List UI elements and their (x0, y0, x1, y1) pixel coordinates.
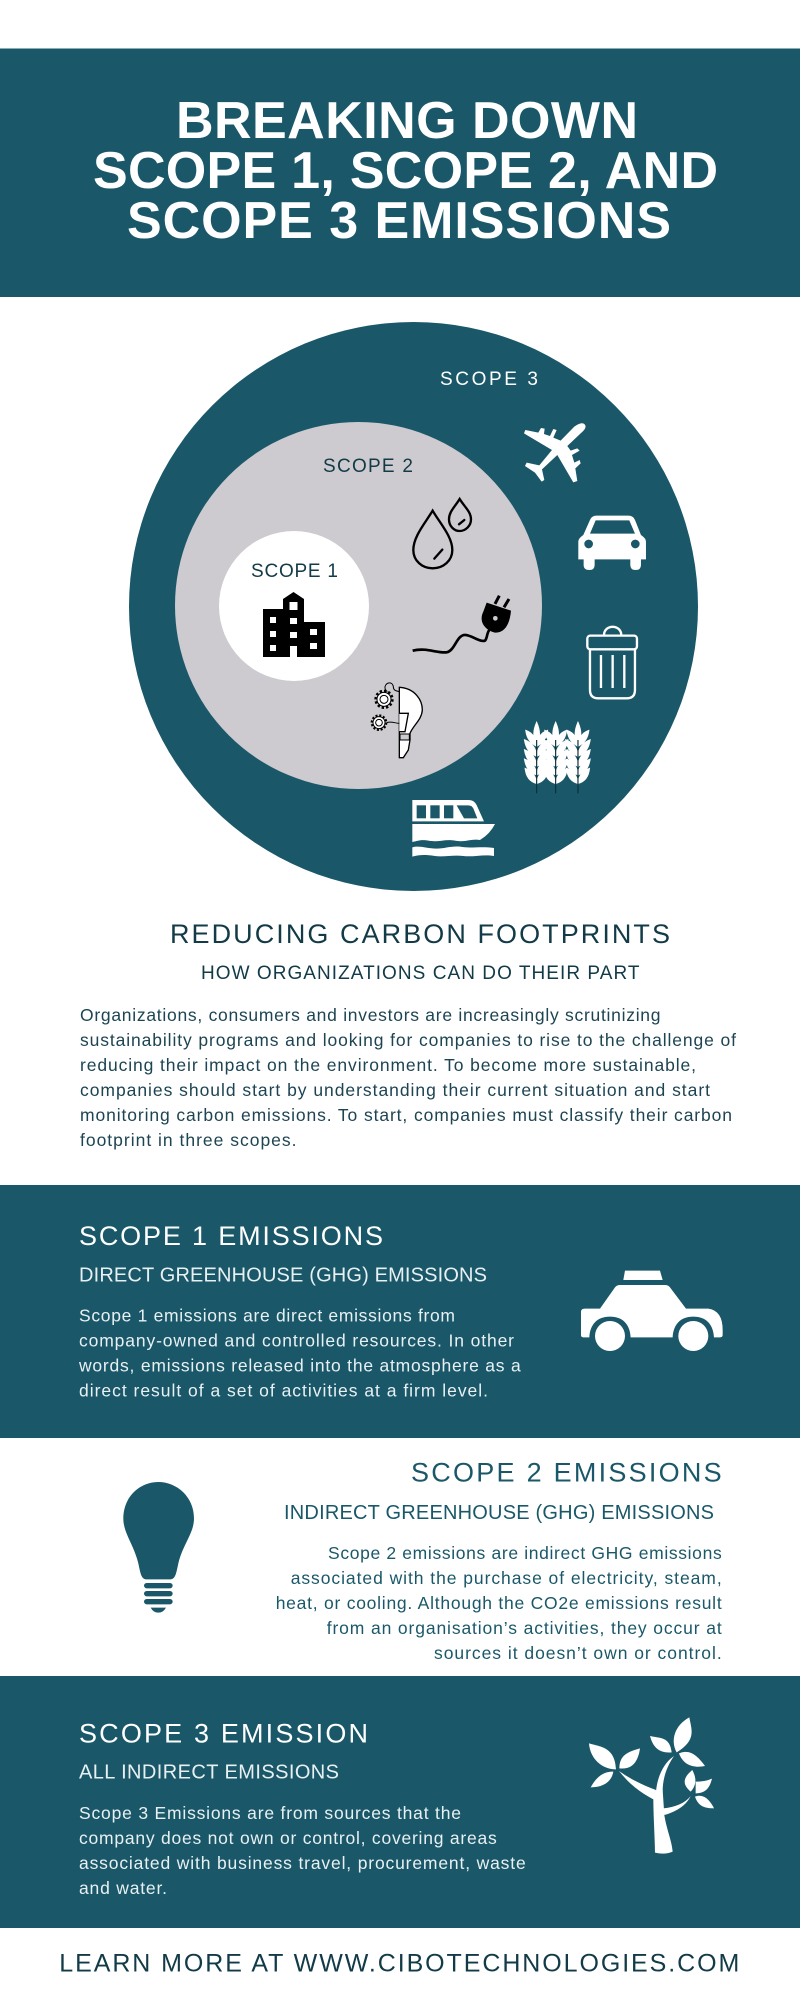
intro paragraph: monitoring carbon emissions. To start, companies must classify their carbon (80, 1105, 732, 1125)
title: SCOPE 1, SCOPE 2, AND (93, 142, 718, 200)
body text: associated with business travel, procurement, waste (79, 1853, 526, 1873)
body text: from an organisation’s activities, they occur at (327, 1618, 722, 1638)
intro paragraph: Organizations, consumers and investors are increasingly scrutinizing (80, 1005, 660, 1025)
body text: Scope 3 Emissions are from sources that the (79, 1803, 461, 1823)
heading: SCOPE 1 EMISSIONS (79, 1221, 383, 1251)
footer call to action: LEARN MORE AT WWW.CIBOTECHNOLOGIES.COM (59, 1950, 739, 1978)
title: SCOPE 3 EMISSIONS (127, 192, 671, 250)
subheading: ALL INDIRECT EMISSIONS (79, 1762, 339, 1784)
icon: boat (412, 800, 495, 857)
icon: plug (413, 596, 511, 652)
title banner (0, 48, 800, 297)
icon: lightbulb with gears (372, 683, 422, 758)
body text: company does not own or control, covering areas (79, 1828, 497, 1848)
icon: airplane (524, 423, 586, 482)
body text: company-owned and controlled resources. In other (79, 1331, 514, 1351)
intro paragraph: companies should start by understanding their current situation and start (80, 1080, 710, 1100)
body text (276, 1543, 722, 1663)
body text: associated with the purchase of electricity, steam, (291, 1568, 722, 1588)
subheading: DIRECT GREENHOUSE (GHG) EMISSIONS (79, 1265, 487, 1287)
section heading: reducing carbon footprints (170, 919, 670, 984)
icon: trash can (587, 627, 637, 698)
heading: SCOPE 2 EMISSIONS (411, 1458, 722, 1488)
subheading: HOW ORGANIZATIONS CAN DO THEIR PART (201, 963, 640, 984)
icon: car (578, 516, 646, 570)
intro paragraph (80, 1005, 736, 1150)
icon: wheat (525, 723, 590, 793)
intro paragraph: footprint in three scopes. (80, 1130, 296, 1150)
body text: words, emissions released into the atmosphere as a (78, 1356, 521, 1376)
label: scope 2: SCOPE 2 (323, 456, 413, 477)
body text (78, 1306, 521, 1401)
title (93, 92, 718, 250)
panel: scope 2 emissions (123, 1458, 722, 1663)
body text: sources it doesn’t own or control. (434, 1643, 722, 1663)
icon: water drops (413, 499, 471, 568)
label: scope 3: SCOPE 3 (440, 369, 538, 390)
icon: lightbulb (123, 1482, 194, 1613)
icon: taxi (581, 1271, 723, 1351)
body text (79, 1803, 526, 1898)
label: scope 1: SCOPE 1 (251, 561, 338, 582)
body text: heat, or cooling. Although the CO2e emissions result (276, 1593, 722, 1613)
icon: building (263, 592, 325, 657)
body text: and water. (79, 1878, 167, 1898)
panel: scope 1 emissions (0, 1185, 800, 1438)
body text: Scope 2 emissions are indirect GHG emissions (328, 1543, 722, 1563)
body text: Scope 1 emissions are direct emissions from (79, 1306, 455, 1326)
body text: direct result of a set of activities at a firm level. (79, 1381, 488, 1401)
intro paragraph: sustainability programs and looking for companies to rise to the challenge of (80, 1030, 736, 1050)
title: BREAKING DOWN (176, 92, 638, 150)
heading: SCOPE 3 EMISSION (79, 1719, 368, 1749)
icon: tree (589, 1717, 714, 1854)
subheading: INDIRECT GREENHOUSE (GHG) EMISSIONS (284, 1502, 714, 1524)
panel: scope 3 emission (0, 1676, 800, 1928)
intro paragraph: reducing their impact on the environment. To become more sustainable, (80, 1055, 696, 1075)
concentric scope diagram (129, 322, 698, 891)
section heading: reducing carbon footprints: REDUCING CARBON FOOTPRINTS (170, 919, 670, 949)
